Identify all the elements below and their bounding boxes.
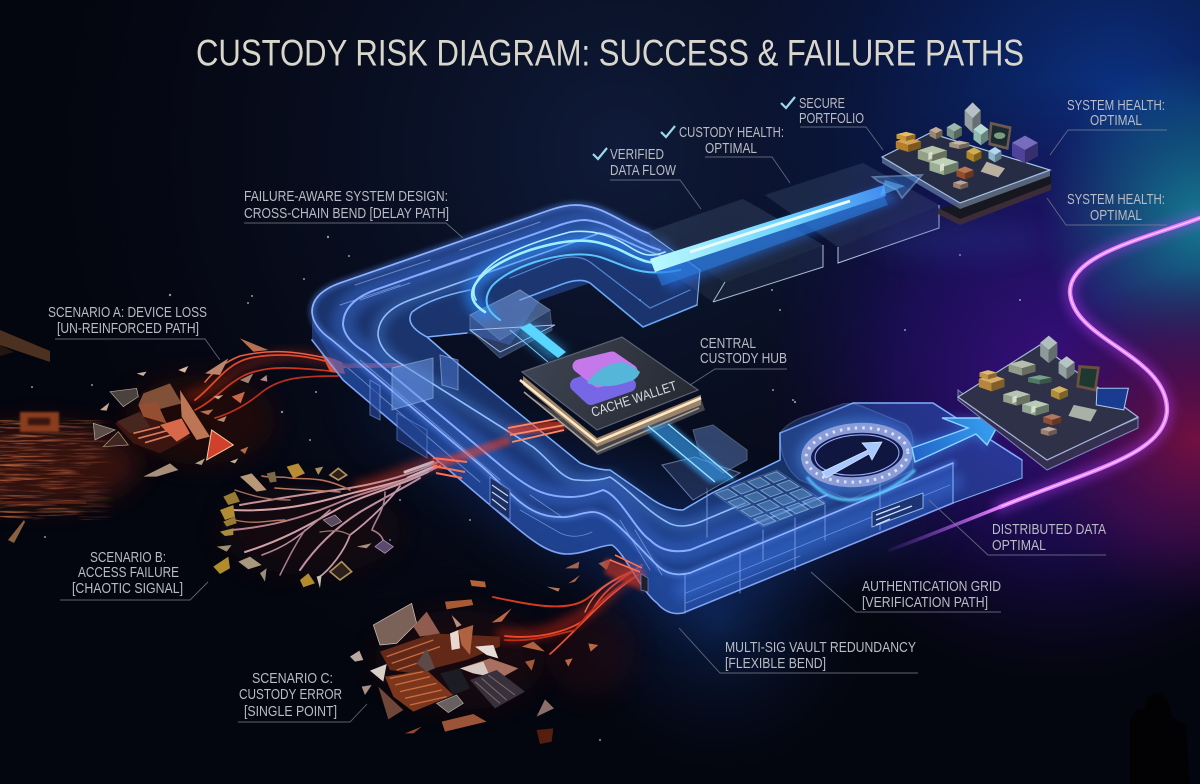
center red crossing strands (433, 418, 565, 478)
label: central custody hub: CUSTODY HUB (700, 350, 787, 367)
label: scenario C: CUSTODY ERROR (239, 686, 342, 703)
label: system health upper: OPTIMAL (1090, 112, 1142, 129)
wall window panels on left arm (370, 355, 510, 520)
stream C: red strands (493, 565, 642, 654)
label: multi-sig vault redundancy: [FLEXIBLE BEND] (725, 655, 826, 672)
label: secure portfolio (781, 95, 883, 150)
starfield particles (31, 236, 1021, 741)
label: distributed data: DISTRIBUTED DATA (992, 521, 1106, 538)
lane 3 (378, 233, 745, 526)
label: failure-aware system design: CROSS-CHAIN BEND [DELAY PATH] (244, 205, 449, 222)
label: verified data flow (593, 146, 701, 209)
wall bottom edge (312, 340, 953, 614)
label: custody health (661, 124, 790, 183)
cyan stream upper into hub (510, 322, 568, 362)
label: secure portfolio: PORTFOLIO (799, 110, 864, 127)
label: verified data flow: VERIFIED (610, 146, 664, 163)
channel side wall shade (312, 325, 953, 614)
label: authentication grid (811, 572, 1001, 612)
label: secure portfolio: SECURE (799, 95, 845, 112)
tray items (979, 336, 1128, 436)
success arrow: bottom (910, 418, 1002, 464)
lane 2 (343, 220, 827, 551)
portfolio items (896, 102, 1038, 189)
label: scenario B: [CHAOTIC SIGNAL] (72, 580, 183, 597)
lane 1: outer wall top (312, 205, 953, 574)
label: central custody hub (690, 335, 787, 385)
stream A: red strands (190, 352, 400, 418)
connector block upper (470, 290, 555, 358)
stream C: shattered document pieces (350, 558, 612, 744)
label: system health lower: SYSTEM HEALTH: (1067, 191, 1165, 208)
label: multi-sig vault redundancy: MULTI-SIG VAULT REDUNDANCY (725, 639, 916, 656)
label: system health lower (1047, 191, 1167, 225)
tray: secure portfolio (875, 102, 1051, 260)
label: scenario C: SCENARIO C: (252, 670, 333, 687)
hub brand text: CACHE WALLET (589, 378, 679, 420)
label: scenario B: ACCESS FAILURE (78, 564, 179, 581)
label: scenario B (60, 549, 208, 600)
tray: distributed data (958, 336, 1138, 470)
label: scenario A: [UN-REINFORCED PATH] (57, 320, 199, 337)
label: system health upper (1050, 97, 1167, 155)
label: scenario B: SCENARIO B: (90, 549, 166, 566)
label: failure-aware system design: FAILURE-AWARE SYSTEM DESIGN: (244, 188, 448, 205)
stream B: gold fragments (213, 463, 393, 588)
label: distributed data: OPTIMAL (992, 537, 1046, 554)
label: system health lower: OPTIMAL (1090, 207, 1142, 224)
label: scenario C (238, 670, 367, 722)
glass box 1 (648, 199, 823, 302)
label: central custody hub: CENTRAL (700, 335, 756, 352)
failure port C block (605, 555, 648, 592)
label: authentication grid: [VERIFICATION PATH] (862, 594, 988, 611)
label: custody health: OPTIMAL (705, 140, 757, 157)
glitch debris field: left edge (0, 330, 140, 543)
label: failure-aware system design (244, 188, 463, 238)
label: scenario C: [SINGLE POINT] (244, 703, 337, 720)
failure stream B: chaotic signal branches (213, 458, 443, 588)
glass vault channel: main platform (312, 205, 1022, 625)
ring inner arrow (822, 442, 882, 478)
glass box 2 (765, 163, 939, 263)
cyan flow lane: top arm (472, 231, 680, 320)
stream A: shattered document pieces (93, 338, 268, 477)
stream B: branching fibres (232, 458, 443, 578)
concentric blue lanes (312, 205, 1022, 614)
title: CUSTODY RISK DIAGRAM: SUCCESS & FAILURE PATHS (196, 32, 1024, 74)
label: custody health: CUSTODY HEALTH: (679, 124, 784, 141)
channel translucent body (312, 205, 1022, 614)
lane glow bands (312, 205, 953, 590)
label: multi-sig vault redundancy (679, 628, 918, 673)
glass boxes along success path (648, 163, 939, 302)
verification ring (780, 404, 915, 500)
hub logo (577, 358, 640, 398)
floor glow below platform (345, 395, 950, 625)
label: distributed data (929, 500, 1106, 555)
neon boundary line (890, 218, 1200, 550)
label: scenario A: SCENARIO A: DEVICE LOSS (48, 304, 207, 321)
lane 4: inner edge (410, 290, 1022, 510)
label: authentication grid: AUTHENTICATION GRID (862, 578, 1001, 595)
failure stream A: device loss fragments (93, 338, 400, 477)
central custody hub chip (520, 337, 705, 455)
data card on wall (872, 493, 923, 527)
authentication keypad grid (712, 470, 825, 527)
label: verified data flow: DATA FLOW (610, 162, 677, 179)
cyan stream lower from hub (643, 423, 737, 483)
label: scenario A (48, 304, 220, 360)
failure stream C: single point shatter (350, 558, 642, 744)
label: system health upper: SYSTEM HEALTH: (1067, 97, 1165, 114)
connector blocks lower (662, 425, 747, 500)
success arrow: top (650, 175, 922, 290)
